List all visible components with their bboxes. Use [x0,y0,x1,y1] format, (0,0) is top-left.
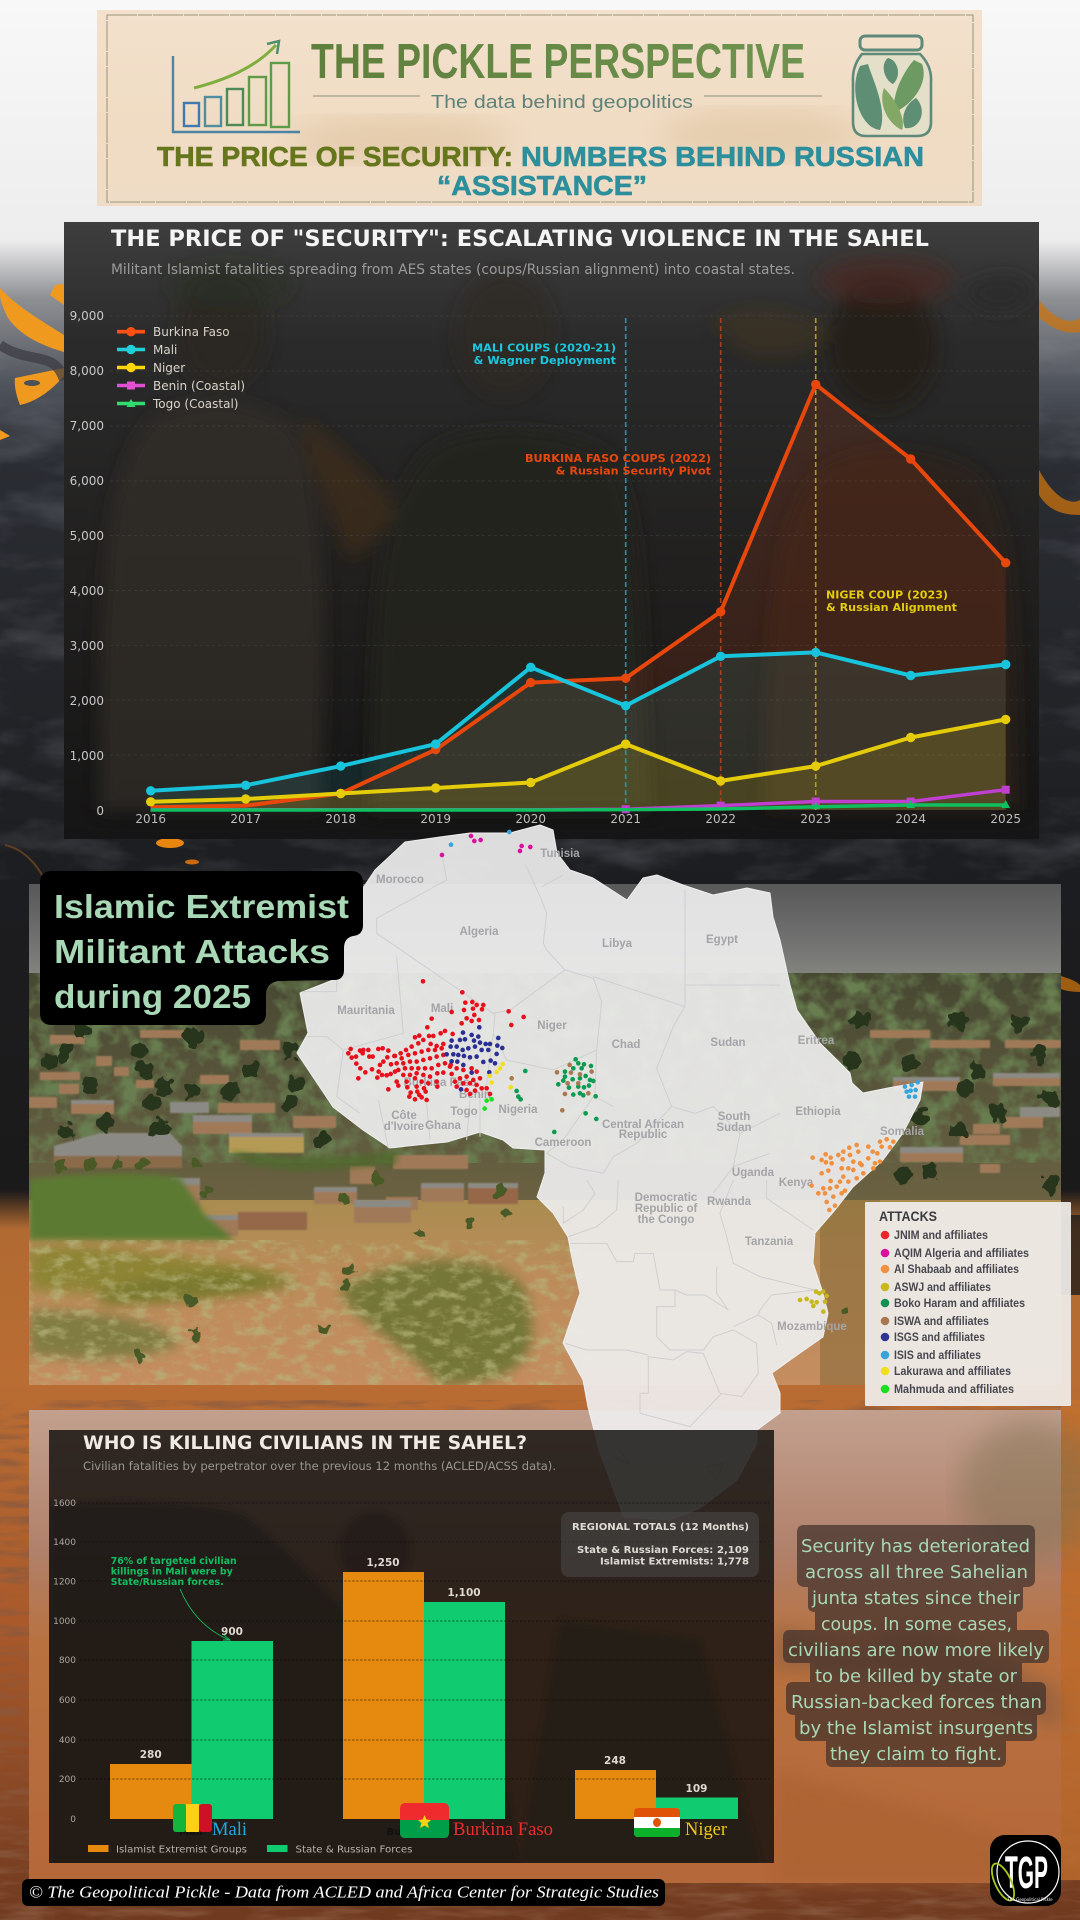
y axis: 0 [70,1815,76,1825]
chart title: THE PRICE OF "SECURITY": ESCALATING VIOLENCE IN THE SAHEL [111,227,929,252]
y axis [70,309,104,818]
country labels: Somalia [880,1126,925,1138]
bars: Niger [575,1770,738,1819]
x axis: 2022 [705,812,736,826]
x axis: 2020 [515,812,546,826]
attack dots: East Africa [800,1082,918,1312]
tagline: The data behind geopolitics [431,92,693,112]
y axis: 1,000 [70,749,104,763]
y axis: 0 [96,804,104,818]
legend: attacks by group: ATTACKS [879,1208,937,1224]
country labels: Togo [450,1106,478,1118]
x axis: 2025 [990,812,1021,826]
callout: 76 percent: 76% of targeted civilian [111,1556,237,1567]
bar value labels: 248 [604,1755,626,1767]
callout: 76 percent: killings in Mali were by [111,1566,233,1578]
bar value labels: 109 [686,1783,707,1795]
chart subtitle: Militant Islamist fatalities spreading from AES states (coups/Russian alignment) into coastal states. [111,262,795,278]
annotation: Burkina Faso coups: BURKINA FASO COUPS (2022) [525,453,711,465]
y axis: 7,000 [70,419,104,433]
callout: regional totals: Islamist Extremists: 1,778 [600,1556,749,1568]
legend: attacks by group: Boko Haram and affiliates [894,1296,1025,1310]
text block: security has deteriorated [783,1525,1049,1767]
text block: security has deteriorated: Security has deteriorated [801,1536,1030,1557]
annotation: Niger coup: NIGER COUP (2023) [826,590,948,602]
icon: Niger flag with label: Niger [685,1819,728,1840]
y axis: 600 [59,1696,76,1706]
heading: Islamic Extremist Militant Attacks: Militant Attacks [54,933,330,970]
line: Burkina Faso [151,380,1010,807]
bar value labels: 280 [140,1749,162,1761]
y axis: 800 [59,1656,76,1666]
x axis: 2023 [800,812,831,826]
country labels: Chad [612,1039,640,1051]
legend: attacks by group: ISGS and affiliates [894,1330,985,1344]
y axis: 6,000 [70,474,104,488]
country labels: Egypt [706,934,738,946]
icon: Mali flag with label [173,1804,247,1840]
country labels: Benin [459,1089,491,1101]
text block: security has deteriorated: coups. In some cases, [821,1614,1012,1635]
country labels: Eritrea [798,1035,835,1047]
heading: Islamic Extremist Militant Attacks [40,871,363,1025]
country labels [337,848,925,1333]
country labels: Mali [431,1003,453,1015]
legend: attacks by group: AQIM Algeria and affiliates [894,1246,1029,1260]
icon: Niger flag with label: Niger [641,1827,671,1838]
icon: Mali flag with label: Mali [212,1819,247,1840]
legend: attacks by group: JNIM and affiliates [894,1228,988,1242]
panel: escalating violence line chart [64,222,1039,839]
country labels: Rwanda [707,1196,752,1208]
country labels: Tunisia [540,848,580,860]
country labels: Sudan [710,1037,746,1049]
country labels: Niger [537,1020,567,1032]
bar value labels: 1,100 [447,1587,481,1599]
y axis: 2,000 [70,694,104,708]
y axis: 1600 [53,1499,76,1509]
trees and fields [29,1174,235,1240]
panel: desert photo background [29,1410,1080,1883]
country labels: Cameroon [535,1137,591,1149]
bar value labels: 900 [221,1626,243,1638]
legend: attacks by group: ISWA and affiliates [894,1314,989,1328]
chart legend: State & Russian Forces [296,1844,412,1856]
text block: security has deteriorated: they claim to fight. [830,1744,1002,1765]
callout: regional totals: REGIONAL TOTALS (12 Months) [572,1522,749,1533]
x axis: 2016 [135,812,166,826]
text block: security has deteriorated: junta states since their [811,1588,1021,1609]
header banner [97,10,982,206]
text block: security has deteriorated: to be killed by state or [815,1666,1018,1687]
panel: village photo background [29,884,1061,1385]
legend: attacks by group: ISIS and affiliates [894,1348,981,1362]
y axis: 200 [59,1775,76,1785]
callout: regional totals [561,1512,759,1577]
icon: Burkina Faso flag with label [387,1803,553,1840]
annotation: Burkina Faso coups: & Russian Security Pivot [556,466,711,478]
country labels: Republic [619,1129,668,1141]
coup event markers [626,318,816,810]
legend: attacks by group: Al Shabaab and affiliates [894,1262,1019,1276]
x axis: 2019 [420,812,451,826]
country labels: Côte [391,1110,417,1122]
heading: Islamic Extremist Militant Attacks: during 2025 [54,978,251,1015]
chart legend [88,1844,412,1856]
line: Benin [151,786,1010,813]
country labels: Morocco [376,874,424,886]
line: Togo [151,800,1010,810]
icon: TGP logo: The Geopolitical Pickle [1006,1897,1053,1902]
country labels: Burkina Faso [404,1077,476,1089]
legend: attacks by group: ASWJ and affiliates [894,1280,991,1294]
icon: TGP logo [987,1835,1061,1906]
annotation: Niger coup [826,590,957,614]
country labels: Tanzania [745,1236,794,1248]
annotation: Mali coups: MALI COUPS (2020-21) [472,342,616,354]
country borders [302,853,780,1193]
map of Africa [297,825,925,1520]
headline [157,141,924,201]
text block: security has deteriorated: civilians are now more likely [788,1640,1044,1661]
text block: security has deteriorated: across all three Sahelian [805,1562,1028,1583]
icon: Niger flag with label [634,1808,728,1840]
bar value labels [140,1557,707,1795]
text block: security has deteriorated: Russian-backed forces than [791,1692,1042,1713]
callout: 76 percent: State/Russian forces. [111,1577,224,1588]
country labels: Algeria [460,926,499,938]
legend: attacks by group: Mahmuda and affiliates [894,1382,1014,1396]
legend: Togo (Coastal) [152,397,238,411]
country labels: Mozambique [777,1321,847,1333]
background photo: three junta leaders [100,256,1035,810]
publication title: THE PICKLE PERSPECTIVE [311,35,805,89]
country labels: Republic of [635,1203,697,1215]
country labels: Libya [602,938,633,950]
x axis [135,812,1021,826]
headline: NUMBERS BEHIND RUSSIAN [521,141,924,172]
x axis: 2021 [610,812,641,826]
attack dots: West Africa [348,832,596,1132]
country labels: d'Ivoire [384,1121,424,1133]
country labels: Sudan [716,1122,752,1134]
y axis: 1400 [53,1538,76,1548]
x axis: 2017 [230,812,261,826]
x axis: 2018 [325,812,356,826]
legend: Benin (Coastal) [153,379,245,393]
icon: Burkina Faso flag with label: Burkina Faso [453,1819,553,1840]
legend: Burkina Faso [153,325,230,339]
callout: 76 percent [111,1556,237,1640]
line: Mali [146,648,1010,796]
legend: attacks by group [865,1202,1071,1406]
area fills under the lines [151,384,1006,810]
headline: THE PRICE OF SECURITY: [157,141,513,172]
chart title: WHO IS KILLING CIVILIANS IN THE SAHEL? [83,1433,527,1454]
y axis: 4,000 [70,584,104,598]
y axis: 3,000 [70,639,104,653]
y axis [53,1499,76,1825]
icon: pickle jar [853,36,931,136]
annotation: Mali coups: & Wagner Deployment [474,355,616,367]
village buildings [29,1030,1061,1236]
text block: security has deteriorated: by the Islamist insurgents [799,1718,1033,1739]
annotation: Burkina Faso coups [525,453,711,478]
bars: Burkina Faso [343,1572,505,1819]
chart subtitle: Civilian fatalities by perpetrator over the previous 12 months (ACLED/ACSS data). [83,1459,556,1473]
y axis: 400 [59,1736,76,1746]
country labels: South [718,1111,750,1123]
legend [117,325,245,411]
country labels: Central African [602,1119,684,1131]
footer credit [22,1879,665,1906]
callout: regional totals: State & Russian Forces: 2,109 [577,1545,749,1556]
chart legend: Islamist Extremist Groups [116,1844,247,1856]
country labels: Ethiopia [795,1106,841,1118]
icon: rising bar chart [173,41,300,132]
y axis: 8,000 [70,364,104,378]
legend: Mali [153,343,177,357]
x axis: 2024 [895,812,926,826]
headline: “ASSISTANCE” [437,170,647,201]
y axis: 9,000 [70,309,104,323]
icon: Burkina Faso flag with label: Burkina Faso [387,1827,460,1838]
country labels: Mauritania [337,1005,395,1017]
country labels: Democratic [635,1192,698,1204]
panel: who is killing civilians bar chart [49,1430,774,1863]
country labels: Uganda [732,1167,775,1179]
annotation: Mali coups [472,342,616,367]
country labels: the Congo [638,1214,694,1226]
heading: Islamic Extremist Militant Attacks: Islamic Extremist [54,888,349,925]
y axis: 1200 [53,1578,76,1588]
footer credit: © The Geopolitical Pickle - Data from ACLED and Africa Center for Strategic Studies [29,1882,659,1902]
y axis: 5,000 [70,529,104,543]
background photo: soldier on vehicle [49,1503,760,1863]
country labels: Kenya [779,1177,814,1189]
bar value labels: 1,250 [366,1557,400,1569]
legend: attacks by group: Lakurawa and affiliates [894,1364,1011,1378]
legend: Niger [153,361,185,375]
icon: Mali flag with label: Mali [179,1827,203,1838]
annotation: Niger coup: & Russian Alignment [826,602,957,614]
y axis: 1000 [53,1617,76,1627]
country labels: Nigeria [498,1104,538,1116]
country labels: Ghana [425,1120,461,1132]
bars: Mali [110,1641,273,1819]
line: Niger [146,715,1010,806]
